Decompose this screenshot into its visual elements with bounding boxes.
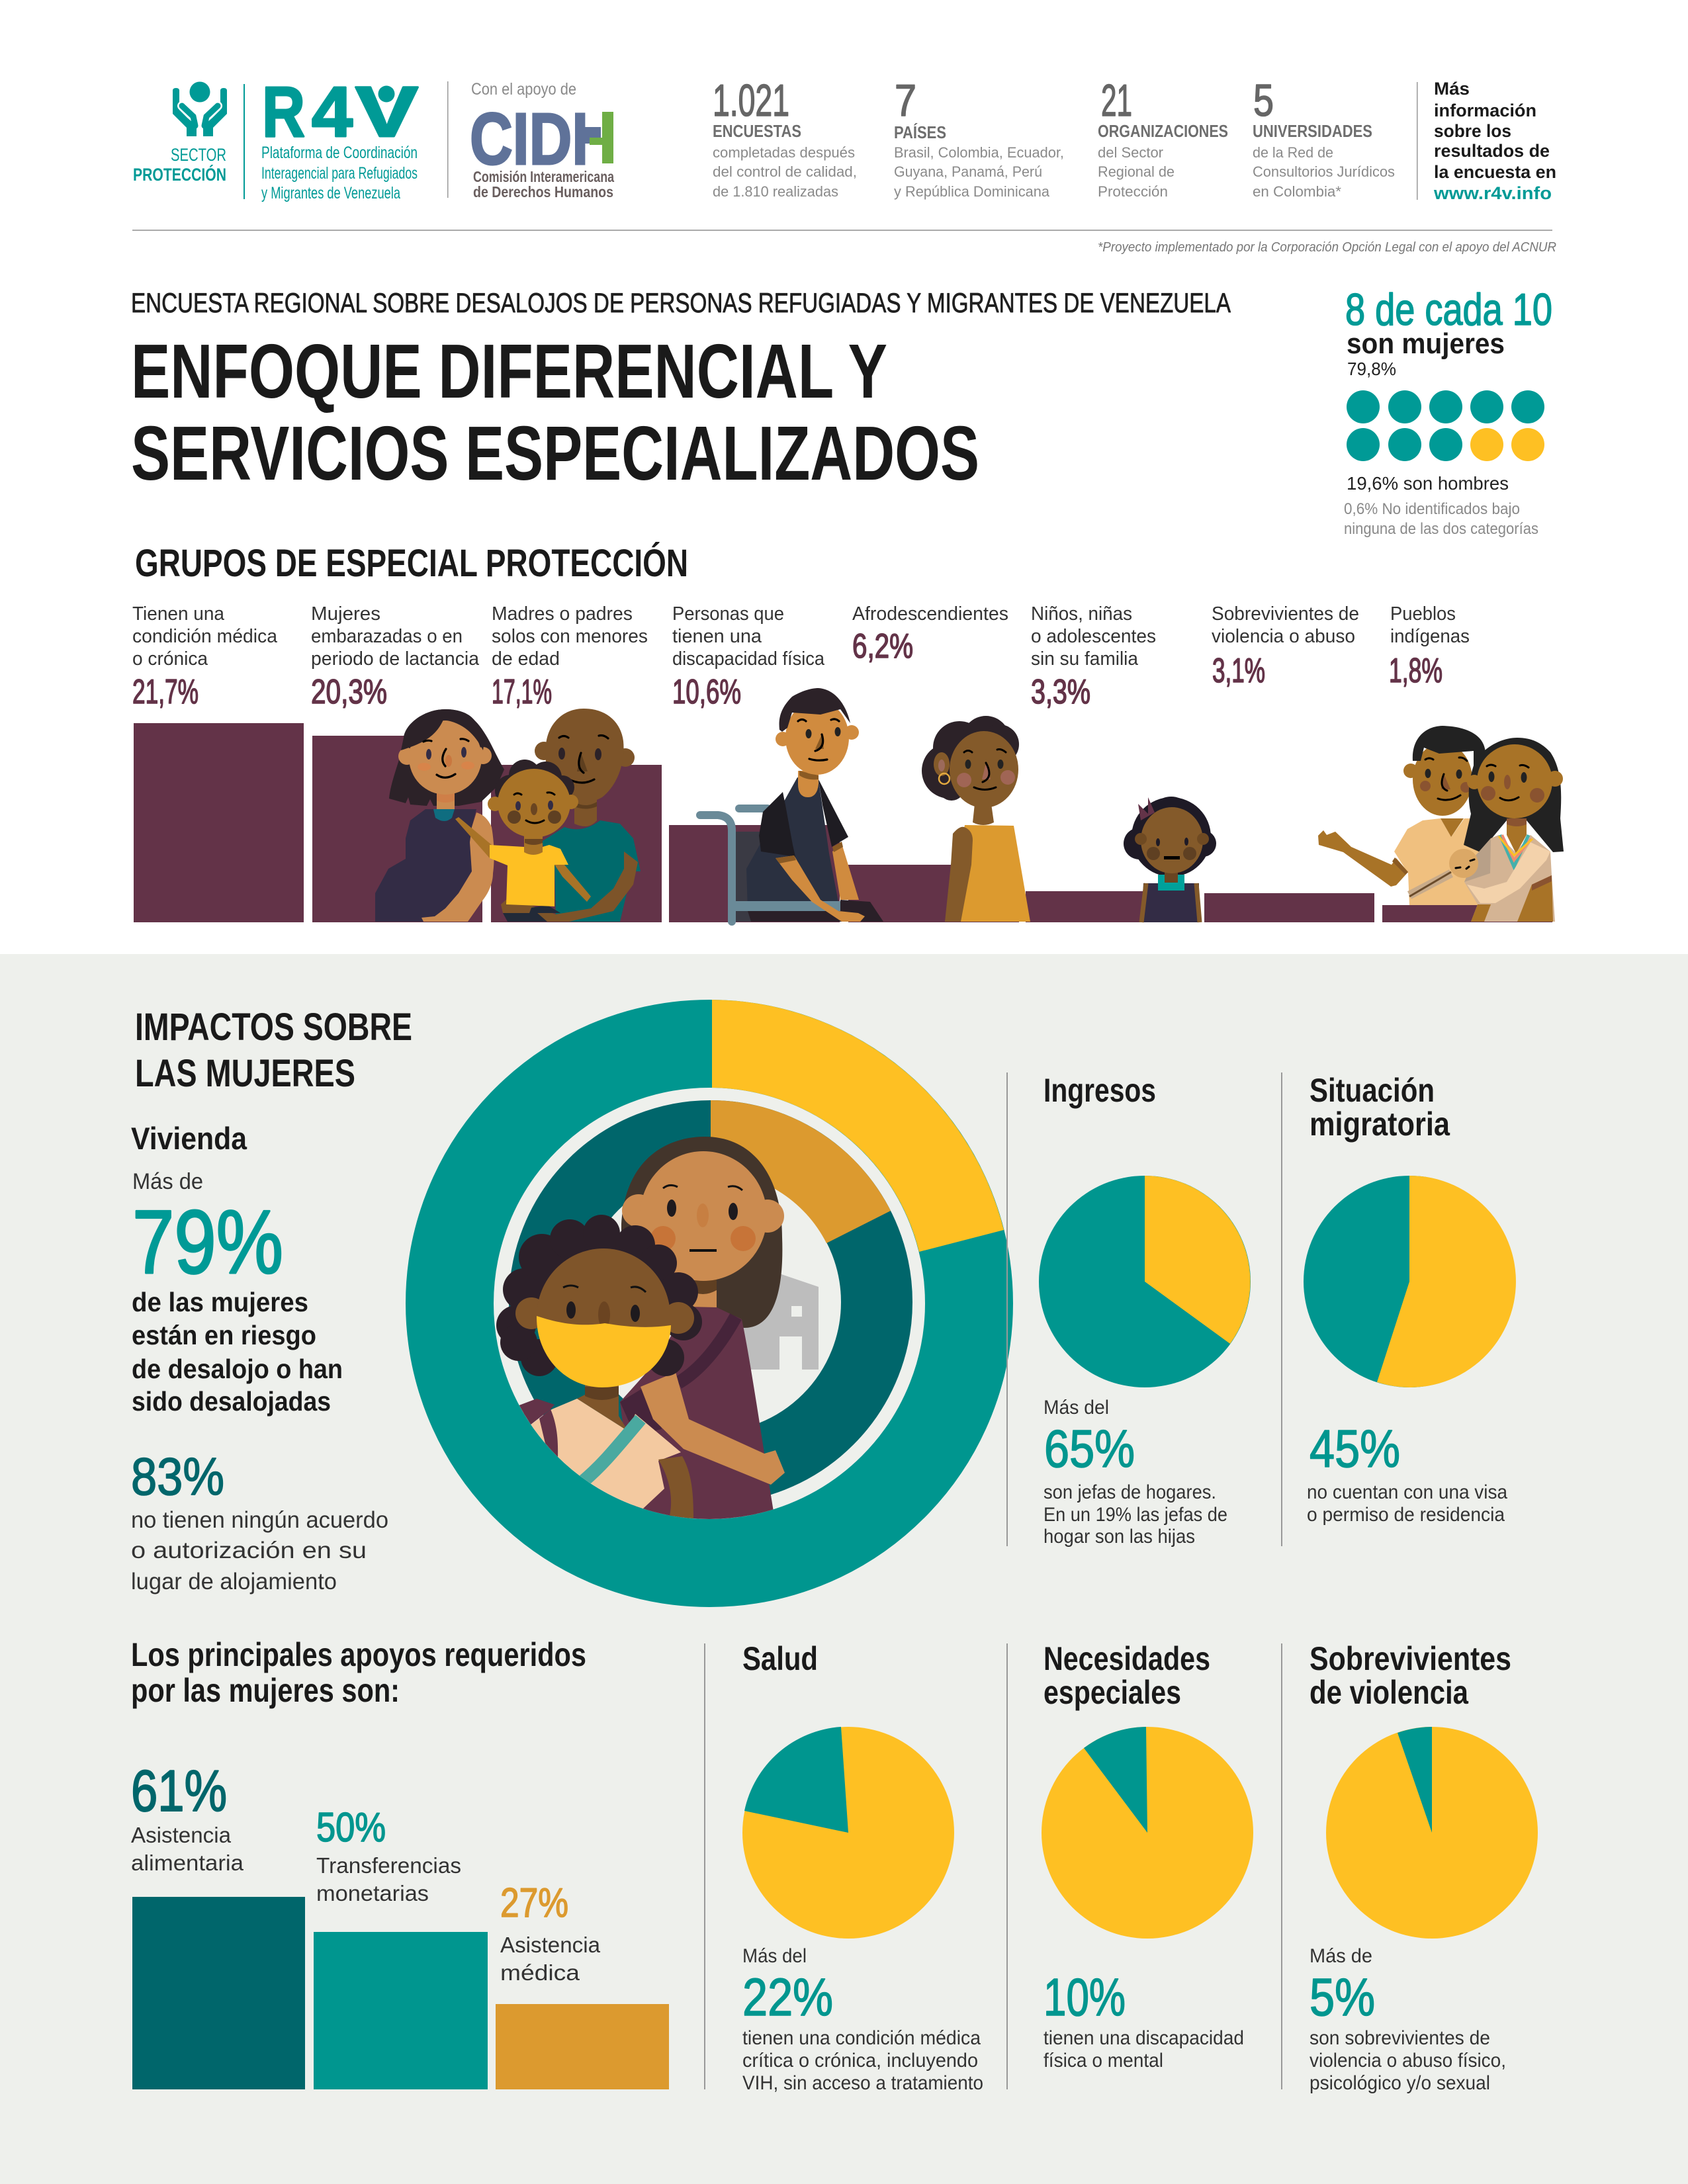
group labels: Sobrevivientes de <box>1212 603 1359 625</box>
panel: situación migratoria <box>1281 1072 1516 1546</box>
logo subtitle: y Migrantes de Venezuela <box>261 184 400 202</box>
illustration: indigenous couple <box>1318 726 1564 922</box>
heading: impactos: LAS MUJERES <box>135 1052 355 1095</box>
group labels: Afrodescendientes <box>852 603 1008 625</box>
CIDH name: Comisión Interamericana <box>473 168 614 185</box>
icon: house <box>728 1274 819 1370</box>
housing text block: lugar de alojamiento <box>131 1569 337 1594</box>
gender stats panel: ninguna de las dos categorías <box>1344 520 1538 538</box>
stat: universidades <box>1253 75 1395 200</box>
logo subtitle <box>261 144 418 202</box>
stat: encuestas: 1.021 <box>713 75 789 126</box>
panel: sobrevivientes de violencia: Sobrevivientes <box>1310 1640 1511 1677</box>
stat: organizaciones: Protección <box>1098 183 1168 200</box>
group percentages: 21,7% <box>132 673 199 711</box>
group labels <box>132 603 1470 670</box>
donut chart with illustration <box>450 1000 1004 1563</box>
housing text block: sido desalojadas <box>132 1386 331 1417</box>
panel: ingresos: Ingresos <box>1044 1072 1156 1109</box>
main title: ENFOQUE DIFERENCIAL Y <box>131 328 887 414</box>
stat: países: 7 <box>895 75 916 126</box>
stat: encuestas: del control de calidad, <box>713 163 857 180</box>
illustration: afro woman <box>922 716 1030 922</box>
heading: impactos: IMPACTOS SOBRE <box>135 1006 412 1049</box>
group labels: o crónica <box>132 648 208 670</box>
more information block <box>1433 79 1556 203</box>
group percentages: 6,2% <box>852 627 913 666</box>
group percentages: 3,3% <box>1031 673 1090 711</box>
panel: necesidades especiales <box>1006 1640 1253 2089</box>
group percentages: 17,1% <box>492 673 552 711</box>
stat: universidades: de la Red de <box>1253 144 1333 161</box>
housing text block: Más de <box>132 1169 203 1194</box>
bar: asistencia médica <box>496 1880 669 2089</box>
panel: salud: tienen una condición médica <box>742 2027 981 2049</box>
inner ring <box>545 1136 877 1468</box>
stat: universidades: Consultorios Jurídicos <box>1253 163 1395 180</box>
more information block: resultados de <box>1434 141 1550 161</box>
panel: sobrevivientes de violencia: Más de <box>1310 1945 1372 1967</box>
heading: principales apoyos: por las mujeres son: <box>131 1672 400 1709</box>
heading: principales apoyos <box>131 1636 586 1709</box>
illustration: man and child <box>455 709 641 922</box>
support label: Con el apoyo de <box>471 80 576 99</box>
group labels: embarazadas o en <box>311 626 463 647</box>
stat: organizaciones: 21 <box>1101 75 1132 126</box>
logo text: sector protección: SECTOR <box>171 145 226 165</box>
icon: protective hands <box>173 82 227 136</box>
housing text block: o autorización en su <box>131 1538 367 1563</box>
CIDH name: de Derechos Humanos <box>473 183 613 200</box>
panel: necesidades especiales: tienen una discapacidad <box>1044 2027 1244 2049</box>
bar: transferencias monetarias: 50% <box>316 1805 386 1851</box>
son mujeres: son mujeres <box>1347 328 1505 360</box>
bar: asistencia alimentaria: alimentaria <box>131 1851 244 1875</box>
group labels: o adolescentes <box>1031 626 1156 647</box>
bar: asistencia alimentaria: Asistencia <box>131 1823 232 1847</box>
bar: transferencias monetarias <box>314 1805 488 2089</box>
panel: ingresos: En un 19% las jefas de <box>1044 1504 1227 1526</box>
panel: ingresos: hogar son las hijas <box>1044 1526 1195 1548</box>
group labels: Tienen una <box>132 603 225 625</box>
bar: transferencias monetarias: Transferencias <box>316 1853 461 1878</box>
panel: salud: VIH, sin acceso a tratamiento <box>742 2072 983 2094</box>
illustration: mother and masked child <box>496 1137 785 1528</box>
panel: sobrevivientes de violencia <box>1281 1640 1538 2094</box>
more information block: sobre los <box>1434 121 1511 141</box>
gender stats panel: 19,6% son hombres <box>1347 473 1509 494</box>
header logos <box>133 71 617 202</box>
panel: necesidades especiales: especiales <box>1044 1674 1181 1711</box>
group percentages: 10,6% <box>672 673 741 711</box>
bar chart: groups <box>134 723 1552 922</box>
bar chart: support <box>131 1758 669 2089</box>
logo: R4V: R <box>262 71 305 152</box>
panel: impacts background <box>0 954 1688 2184</box>
pie: violencia <box>1326 1727 1538 1939</box>
housing text block: de desalojo o han <box>132 1354 343 1384</box>
illustration: girl <box>1124 797 1216 922</box>
logo: R4V: 4 <box>312 71 353 152</box>
group labels: Mujeres <box>311 603 380 625</box>
panel: sobrevivientes de violencia: de violencia <box>1310 1674 1469 1711</box>
panel: ingresos: Más del <box>1044 1397 1109 1419</box>
stat: universidades: 5 <box>1253 75 1274 126</box>
stat: organizaciones: del Sector <box>1098 144 1163 161</box>
group labels: violencia o abuso <box>1212 626 1355 647</box>
panel: sobrevivientes de violencia: psicológico y/o sexual <box>1310 2072 1490 2094</box>
group percentages: 3,1% <box>1212 652 1265 690</box>
logo: CIDH: CIDH <box>470 99 615 180</box>
panel: ingresos <box>1006 1072 1251 1548</box>
headline: 8 de cada 10: 8 de cada 10 <box>1345 284 1552 335</box>
illustration: man in wheelchair <box>700 688 883 922</box>
panel: sobrevivientes de violencia: son sobrevivientes de <box>1310 2027 1490 2049</box>
stat: universidades: UNIVERSIDADES <box>1253 121 1372 141</box>
bar: asistencia médica: 27% <box>500 1880 568 1926</box>
main title: SERVICIOS ESPECIALIZADOS <box>131 410 979 496</box>
panel: sobrevivientes de violencia: 5% <box>1310 1968 1375 2027</box>
more information block: www.r4v.info <box>1433 183 1552 203</box>
stat: países <box>894 75 1064 200</box>
stat: encuestas: ENCUESTAS <box>713 121 801 141</box>
logo subtitle: Plataforma de Coordinación <box>261 144 418 162</box>
pie: ingresos <box>1039 1176 1251 1387</box>
group labels: sin su familia <box>1031 648 1139 670</box>
group labels: Niños, niñas <box>1031 603 1132 625</box>
panel: ingresos: son jefas de hogares. <box>1044 1481 1216 1503</box>
stat: países: Guyana, Panamá, Perú <box>894 163 1042 180</box>
panel: salud <box>704 1640 983 2094</box>
stat: encuestas: completadas después <box>713 144 855 161</box>
pie: necesidades <box>1042 1727 1253 1939</box>
group labels: tienen una <box>672 626 762 647</box>
gender stats panel: 0,6% No identificados bajo <box>1344 500 1520 518</box>
stat: encuestas <box>713 75 857 200</box>
main title <box>131 328 979 496</box>
stat: países: PAÍSES <box>894 122 946 142</box>
panel: salud: crítica o crónica, incluyendo <box>742 2050 978 2072</box>
logo text: sector protección <box>133 145 226 185</box>
group labels: Personas que <box>672 603 784 625</box>
logo text: sector protección: PROTECCIÓN <box>133 164 226 185</box>
housing text block: están en riesgo <box>132 1320 316 1350</box>
heading: grupos: GRUPOS DE ESPECIAL PROTECCIÓN <box>135 542 688 585</box>
group percentages <box>132 627 1443 711</box>
pie: migración <box>1304 1176 1516 1387</box>
divider <box>244 84 245 199</box>
panel: situación migratoria: o permiso de residencia <box>1307 1504 1505 1526</box>
panel: sobrevivientes de violencia: violencia o abuso físico, <box>1310 2050 1506 2072</box>
group labels: Madres o padres <box>492 603 633 625</box>
gender stats panel: 79,8% <box>1347 359 1396 379</box>
stat: organizaciones <box>1098 75 1228 200</box>
number: 83%: 83% <box>131 1447 224 1506</box>
bar: transferencias monetarias: monetarias <box>316 1881 429 1905</box>
panel: situación migratoria: no cuentan con una visa <box>1307 1481 1507 1503</box>
big number: 79%: 79% <box>132 1192 283 1292</box>
stat: países: Brasil, Colombia, Ecuador, <box>894 144 1064 161</box>
CIDH name <box>473 168 614 200</box>
logo: R4V <box>262 71 418 152</box>
panel: ingresos: 65% <box>1044 1419 1135 1478</box>
panel: salud: 22% <box>742 1968 833 2027</box>
panel: necesidades especiales: física o mental <box>1044 2050 1163 2072</box>
group labels: de edad <box>492 648 560 670</box>
footnote: *Proyecto implementado por la Corporación Opción Legal con el apoyo del ACNUR <box>1098 240 1556 255</box>
group labels: solos con menores <box>492 626 648 647</box>
bar: asistencia alimentaria: 61% <box>131 1758 227 1823</box>
more information block: la encuesta en <box>1434 162 1556 182</box>
group labels: Pueblos <box>1390 603 1456 625</box>
stat: países: y República Dominicana <box>894 183 1050 200</box>
group percentages: 1,8% <box>1389 652 1443 690</box>
logo: R4V: V <box>355 71 418 152</box>
group labels: periodo de lactancia <box>311 648 480 670</box>
panel: necesidades especiales: Necesidades <box>1044 1640 1210 1677</box>
more information block: Más <box>1434 79 1470 99</box>
gender stats panel <box>1344 284 1552 538</box>
housing text block: no tienen ningún acuerdo <box>131 1507 388 1533</box>
illustration: pregnant woman <box>375 709 504 922</box>
logo subtitle: Interagencial para Refugiados <box>261 164 418 183</box>
housing text block: de las mujeres <box>132 1287 308 1317</box>
panel: salud: Más del <box>742 1945 807 1967</box>
group labels: indígenas <box>1390 626 1470 647</box>
panel: necesidades especiales: 10% <box>1044 1968 1126 2027</box>
panel: situación migratoria: Situación <box>1310 1072 1435 1109</box>
outer ring <box>450 1044 969 1563</box>
stat: organizaciones: ORGANIZACIONES <box>1098 121 1228 141</box>
dot pictogram <box>1347 390 1544 461</box>
stat: universidades: en Colombia* <box>1253 183 1341 200</box>
panel: situación migratoria: 45% <box>1310 1419 1400 1478</box>
panel: situación migratoria: migratoria <box>1310 1106 1450 1143</box>
heading: impactos <box>135 1006 412 1095</box>
bar: asistencia alimentaria <box>131 1758 305 2089</box>
more information block: información <box>1434 101 1536 120</box>
bar: asistencia médica: Asistencia <box>500 1933 601 1957</box>
heading: principales apoyos: Los principales apoyos requeridos <box>131 1636 586 1673</box>
survey title: ENCUESTA REGIONAL SOBRE DESALOJOS DE PERSONAS REFUGIADAS Y MIGRANTES DE VENEZUELA <box>131 287 1231 318</box>
housing text block <box>131 1121 388 1594</box>
group labels: condición médica <box>132 626 278 647</box>
housing text block: Vivienda <box>131 1121 247 1156</box>
group percentages: 20,3% <box>311 673 387 711</box>
bar: asistencia médica: médica <box>500 1960 580 1985</box>
pie: salud <box>742 1727 954 1939</box>
panel: salud: Salud <box>742 1640 818 1677</box>
group labels: discapacidad física <box>672 648 825 670</box>
stat: encuestas: de 1.810 realizadas <box>713 183 838 200</box>
stat: organizaciones: Regional de <box>1098 163 1175 180</box>
